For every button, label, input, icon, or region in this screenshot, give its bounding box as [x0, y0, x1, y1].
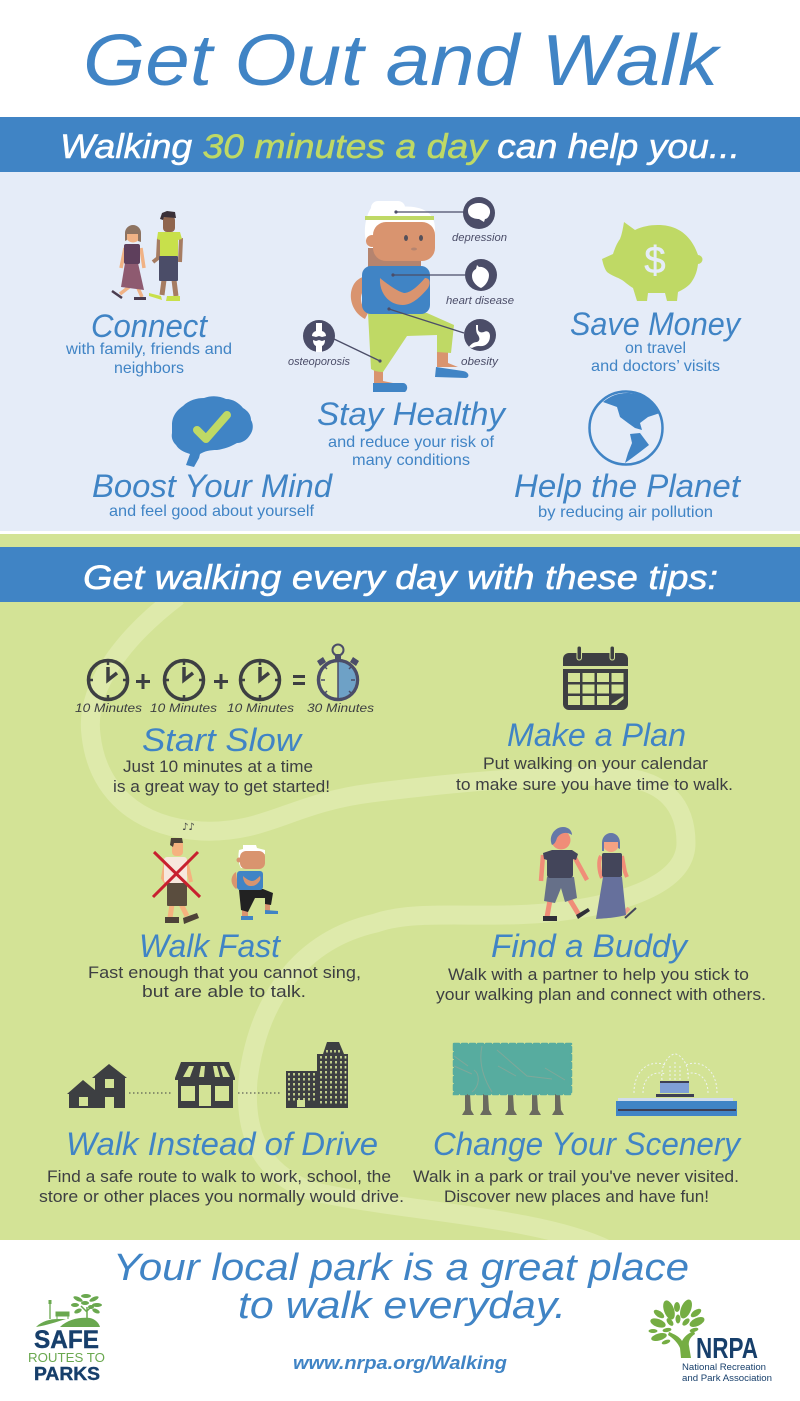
link: website: www.nrpa.org/Walking: [293, 1353, 507, 1373]
path: dotted line to buildings: [238, 1092, 280, 1094]
logo: safe routes to parks: [28, 1294, 105, 1384]
text: make a plan description: to make sure you have time to walk.: [456, 776, 733, 794]
heading: start slow: Start Slow: [142, 722, 303, 758]
heading: help the planet: Help the Planet: [514, 468, 741, 504]
callout: obesity: [387, 307, 500, 368]
heading: make a plan: Make a Plan: [507, 717, 686, 753]
icon: office buildings: [286, 1042, 348, 1108]
icon: store: [175, 1062, 235, 1108]
callout: osteoporosis: [288, 320, 382, 368]
text: find a buddy description: your walking plan and connect with others.: [436, 986, 766, 1004]
text: change your scenery description: Walk in a park or trail you've never visited.: [413, 1168, 739, 1186]
symbols: plus and equals: [136, 674, 305, 689]
banner: tips: Get walking every day with these tips:: [83, 559, 718, 597]
text: help the planet description: by reducing air pollution: [538, 504, 713, 521]
closing message: [113, 1247, 689, 1327]
tip: walk fast: [88, 822, 361, 1001]
labels: minutes: 10 Minutes: [75, 701, 142, 715]
tip: walk instead of drive: [39, 1042, 404, 1206]
tip: find a buddy: [436, 827, 766, 1004]
icon: piggy bank: [602, 222, 702, 301]
callout: depression: [394, 197, 507, 244]
callout: heart disease: [391, 259, 514, 307]
icon: music notes: ♪♪: [182, 822, 195, 833]
text: make a plan description: Put walking on your calendar: [483, 755, 709, 773]
labels: minutes: 10 Minutes: [150, 701, 217, 715]
text: walk instead of drive description: store or other places you normally would drive.: [39, 1188, 404, 1206]
labels: minutes: 10 Minutes: [227, 701, 294, 715]
banner: walking 30 minutes: [0, 117, 800, 172]
heading: walk fast: Walk Fast: [139, 928, 281, 964]
callout: obesity: obesity: [461, 356, 500, 368]
icon: piggy bank: $: [644, 240, 666, 282]
figure: walking woman: [596, 833, 636, 919]
callout: osteoporosis: osteoporosis: [288, 356, 350, 368]
text: save money description: [591, 340, 720, 375]
text: walk instead of drive description: [39, 1168, 404, 1206]
panel: benefits: [0, 172, 800, 531]
labels: minutes: [75, 701, 374, 715]
closing message: to walk everyday.: [238, 1285, 566, 1327]
text: change your scenery description: Discover new places and have fun!: [444, 1188, 709, 1206]
heading: change your scenery: Change Your Scenery: [433, 1126, 742, 1162]
labels: minutes: 30 Minutes: [307, 701, 374, 715]
figure: stay healthy person: [351, 201, 468, 392]
icon: second clock: [164, 660, 204, 700]
text: stay healthy description: [328, 434, 495, 469]
text: walk fast description: [88, 964, 361, 1001]
icon: stopwatch: [317, 644, 359, 700]
callout: depression: depression: [452, 232, 507, 244]
text: connect description: neighbors: [114, 360, 184, 377]
icon: couple walking: [112, 211, 182, 301]
icon: globe: [590, 392, 662, 464]
logo: safe routes to parks: SAFE: [34, 1326, 99, 1354]
logo: nrpa: and Park Association: [682, 1373, 772, 1383]
banner: tips: [0, 547, 800, 602]
text: save money description: on travel: [625, 340, 686, 357]
figure: man singing crossed out: [153, 838, 200, 924]
text: find a buddy description: Walk with a partner to help you stick to: [448, 966, 749, 984]
figure: walking man: [541, 827, 590, 921]
icon: brain with check mark: [172, 396, 253, 467]
icon: row of trees: [454, 1044, 571, 1115]
text: walk fast description: Fast enough that you cannot sing,: [88, 964, 361, 982]
banner: walking 30 minutes: Walking 30 minutes a day can help you...: [60, 128, 740, 166]
logo: safe routes to parks: ROUTES TO: [28, 1351, 105, 1365]
icon: calendar: [563, 646, 628, 710]
logo: nrpa: National Recreation: [682, 1362, 766, 1372]
path: dotted line to store: [129, 1092, 171, 1094]
text: change your scenery description: [413, 1168, 739, 1206]
text: boost your mind description: and feel good about yourself: [109, 503, 315, 520]
text: make a plan description: [456, 755, 733, 794]
text: stay healthy description: many conditions: [352, 452, 470, 469]
figure: healthy walker: [232, 845, 278, 920]
text: walk fast description: but are able to talk.: [142, 983, 306, 1001]
text: connect description: [65, 341, 232, 377]
text: walk instead of drive description: Find a safe route to walk to work, school, the: [47, 1168, 391, 1186]
heading: walk instead of drive: Walk Instead of Drive: [66, 1126, 378, 1162]
tip: change your scenery: [413, 1044, 742, 1206]
callout: heart disease: heart disease: [446, 295, 514, 307]
heading: find a buddy: Find a Buddy: [491, 928, 689, 964]
title: Get Out and Walk: [83, 21, 722, 101]
icon: third clock: [240, 660, 280, 700]
text: save money description: and doctors’ visits: [591, 358, 720, 375]
panel: footer background: [0, 1240, 800, 1401]
tip: make a plan: [456, 646, 733, 794]
heading: save money: Save Money: [570, 306, 742, 342]
text: find a buddy description: [436, 966, 766, 1004]
heading: stay healthy: Stay Healthy: [317, 396, 507, 432]
icon: fountain: [616, 1054, 737, 1116]
text: stay healthy description: and reduce your risk of: [328, 434, 495, 451]
logo: nrpa: NRPA: [696, 1333, 758, 1365]
heading: boost your mind: Boost Your Mind: [92, 468, 333, 504]
text: start slow description: Just 10 minutes at a time: [123, 758, 313, 776]
icon: house: [67, 1064, 127, 1108]
text: connect description: with family, friends and: [65, 341, 232, 358]
heading: connect: Connect: [91, 308, 208, 344]
closing message: Your local park is a great place: [113, 1247, 689, 1289]
text: start slow description: [113, 758, 330, 796]
icon: clock: [88, 660, 128, 700]
text: start slow description: is a great way to get started!: [113, 778, 330, 796]
panel: tips background: [0, 534, 800, 1250]
tip: start slow: [75, 644, 374, 796]
logo: nrpa: [648, 1298, 772, 1383]
logo: safe routes to parks: PARKS: [34, 1364, 100, 1384]
